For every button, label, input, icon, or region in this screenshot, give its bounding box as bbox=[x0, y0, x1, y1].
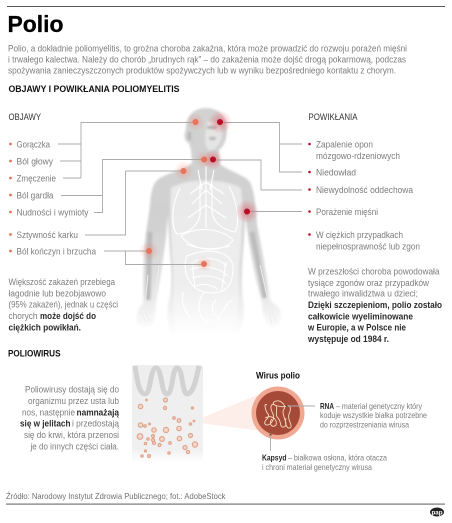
symptoms note: ciężkich powikłań. bbox=[8, 322, 81, 334]
complications list: W ciężkich przypadkach bbox=[316, 230, 403, 241]
capsid description: i chroni materiał genetyczny wirusa bbox=[262, 462, 372, 472]
organs bbox=[173, 166, 237, 322]
capsid description: Kapsyd bbox=[262, 452, 286, 462]
marker: throat complication bbox=[203, 150, 223, 170]
capsid pointer bbox=[270, 434, 272, 451]
RNA description: – materiał genetyczny który bbox=[336, 401, 423, 411]
poliovirus description bbox=[20, 384, 120, 452]
marker: arm bbox=[139, 241, 159, 261]
symptoms list: Sztywność karku bbox=[16, 230, 78, 241]
symptoms note: chorych bbox=[8, 311, 38, 322]
human body illustration bbox=[136, 108, 281, 340]
complications list bbox=[308, 140, 420, 252]
poliovirus description: namnażają bbox=[76, 408, 120, 418]
poliovirus description: i przedostają bbox=[72, 418, 120, 430]
symptoms list: Ból głowy bbox=[16, 156, 53, 168]
symptoms note: łagodnie lub bezobjawowo bbox=[8, 288, 106, 300]
intro text bbox=[8, 44, 407, 76]
complications list: Porażenie mięśni bbox=[316, 207, 378, 218]
intestine villi diagram bbox=[132, 365, 203, 463]
complications note bbox=[307, 266, 442, 345]
bottom rule bbox=[6, 504, 445, 505]
complications list: Niewydolność oddechowa bbox=[316, 185, 414, 196]
complications note: w Europie, a w Polsce nie bbox=[307, 322, 406, 334]
RNA pointer bbox=[286, 405, 315, 407]
face shading bbox=[188, 122, 222, 150]
symptoms list: Zmęczenie bbox=[16, 174, 56, 184]
marker: head symptom bbox=[186, 113, 204, 131]
magnification beam bbox=[192, 393, 262, 431]
top rule bbox=[7, 6, 445, 7]
complications list: Zapalenie opon bbox=[316, 140, 373, 150]
symptoms note: może dojść do bbox=[40, 311, 96, 322]
capsid description: – białkowa osłona, która otacza bbox=[288, 452, 387, 462]
complications list: mózgowo-rdzeniowych bbox=[316, 151, 400, 162]
virus label: Wirus polio bbox=[256, 370, 300, 380]
heading: poliovirus: POLIOWIRUS bbox=[8, 348, 60, 358]
marker: neck bbox=[174, 161, 194, 181]
symptoms list: Nudności i wymioty bbox=[16, 208, 89, 218]
intro text: spożywania zanieczyszczonych produktów spożywczych lub w wyniku bezpośredniego kontaktu z chorym. bbox=[8, 66, 396, 76]
complications note: występuje od 1984 r. bbox=[307, 334, 389, 345]
title: Polio bbox=[8, 11, 64, 37]
heading: symptoms and complications: OBJAWY I POWIKŁANIA POLIOMYELITIS bbox=[8, 84, 180, 94]
RNA description bbox=[320, 401, 427, 430]
symptoms header: OBJAWY bbox=[8, 112, 41, 122]
complications list: niepełnosprawność lub zgon bbox=[316, 242, 420, 252]
symptoms list bbox=[9, 140, 97, 258]
symptoms list: Ból kończyn i brzucha bbox=[16, 246, 97, 258]
marker: abdomen bbox=[196, 256, 212, 272]
complications note: trwałego inwalidztwa u dzieci; bbox=[308, 288, 418, 300]
symptoms connector lines bbox=[58, 122, 201, 264]
poliovirus description: organizmu przez usta lub bbox=[28, 396, 119, 407]
symptoms list: Ból gardła bbox=[16, 190, 54, 202]
PAP logo bbox=[430, 508, 444, 516]
complications header: POWIKŁANIA bbox=[308, 112, 358, 122]
marker: throat symptom bbox=[195, 150, 213, 168]
PAP logo: pap bbox=[432, 510, 443, 516]
poliovirus description: się w jelitach bbox=[20, 418, 71, 430]
virus particle bbox=[252, 386, 304, 440]
poliovirus description: Poliowirusy dostają się do bbox=[25, 384, 119, 396]
torso bbox=[170, 180, 242, 335]
RNA description: do rozprzestrzeniania wirusa bbox=[320, 420, 409, 430]
capsid description bbox=[262, 452, 387, 472]
darker arm shading bbox=[148, 232, 265, 300]
poliovirus description: nos, następnie bbox=[22, 408, 75, 418]
complications connector lines bbox=[216, 122, 302, 212]
marker: shoulder complication bbox=[235, 200, 259, 224]
symptoms list: Gorączka bbox=[16, 140, 51, 150]
RNA description: koduje wszystkie białka potrzebne bbox=[320, 410, 427, 420]
source: Źródło: Narodowy Instytut Zdrowia Publicznego; fot.: AdobeStock bbox=[6, 491, 226, 501]
RNA strand bbox=[265, 401, 291, 428]
complications note: całkowicie wyeliminowane bbox=[308, 312, 413, 322]
symptoms note: Większość zakażeń przebiega bbox=[8, 277, 116, 288]
poliovirus description: je do innych części ciała. bbox=[30, 442, 119, 452]
complications note: tysiące zgonów oraz przypadków bbox=[308, 278, 429, 289]
marker: head complication bbox=[208, 110, 232, 134]
poliovirus description: się do krwi, która przenosi bbox=[24, 430, 119, 441]
complications list: Niedowład bbox=[316, 168, 356, 178]
symptoms note bbox=[8, 277, 118, 334]
symptoms note: (95% zakażeń), jednak u części bbox=[8, 300, 118, 310]
RNA description: RNA bbox=[320, 401, 334, 411]
